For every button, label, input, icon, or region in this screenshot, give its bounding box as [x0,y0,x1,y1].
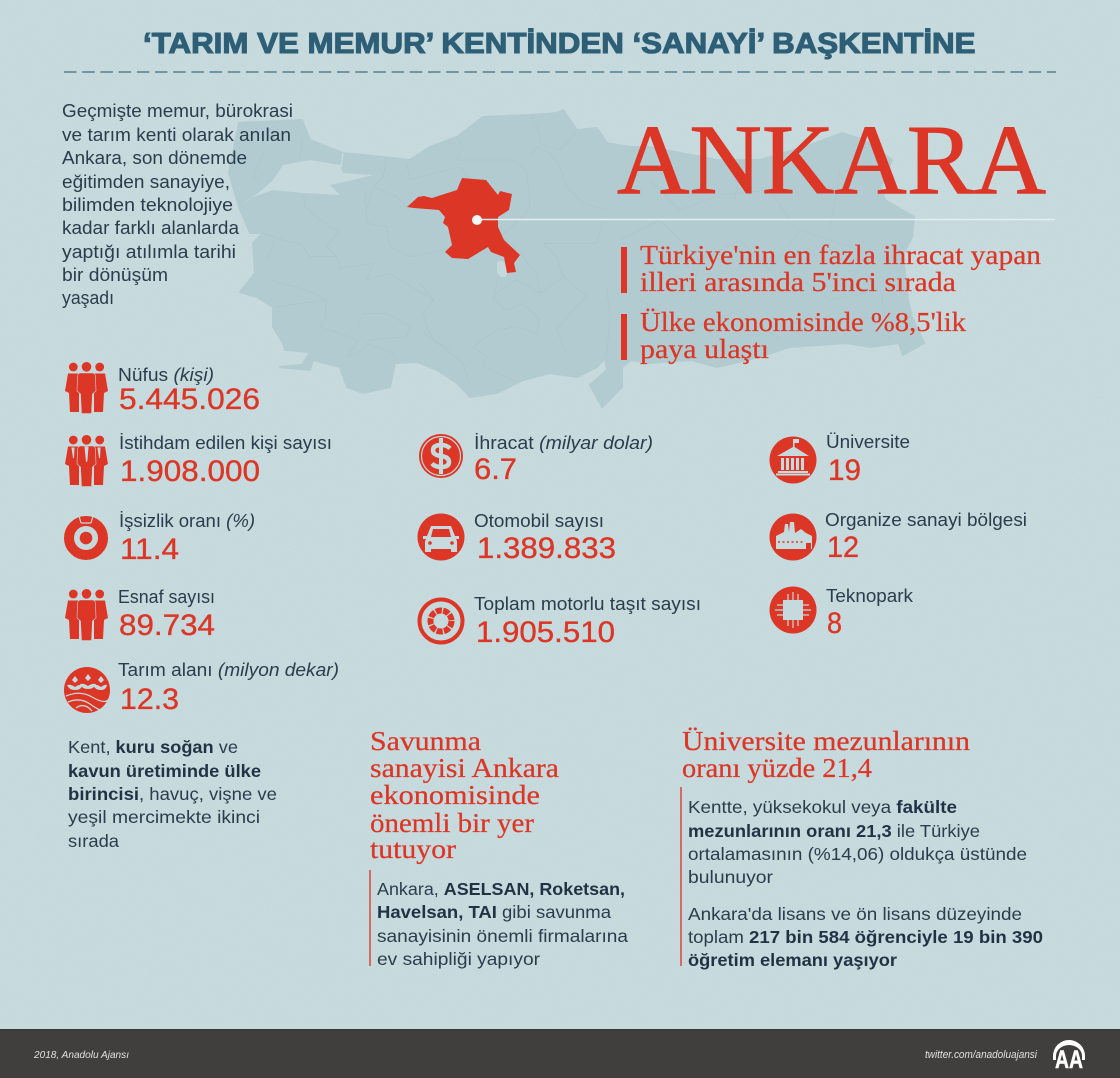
stat: tradesmen: 89.734 [119,609,215,642]
stat: farmland: 12.3 [120,683,179,716]
stat: cars: Otomobil sayısı [474,511,604,531]
highlight: economy share [621,307,967,364]
intro text: Ankara, son dönemde [62,148,247,168]
stat: cars [418,511,616,565]
stat: motor vehicles: 1.905.510 [476,616,615,649]
heading: defense industry: ekonomisinde [370,780,540,810]
stat: farmland [64,660,339,716]
text block: defense industry: ev sahipliği yapıyor [377,949,540,969]
icon: wheel [420,600,462,642]
stat: cars: 1.389.833 [477,532,616,565]
intro text: ve tarım kenti olarak anılan [62,125,291,145]
heading: defense industry: sanayisi Ankara [370,753,559,783]
city name: ANKARA [617,104,1046,215]
stat: population: Nüfus (kişi) [118,365,214,385]
icon: farm plants [64,667,110,713]
stat: universities [770,432,910,487]
stat: unemployment: İşsizlik oranı (%) [119,511,255,531]
text block: defense industry: Ankara, ASELSAN, Roketsan, [377,879,625,899]
icon: university building [770,436,816,484]
heading: university graduates [682,726,971,783]
highlight: export rank [621,240,1042,297]
heading: university graduates: Üniversite mezunlarının [682,726,971,756]
map of Turkey [229,110,924,407]
icon: people [65,589,108,640]
text block: university graduates: Ankara'da lisans ve ön lisans düzeyinde [688,904,1022,924]
intro text: bir dönüşüm [62,265,168,285]
text block: agriculture: Kent, kuru soğan ve [68,737,238,757]
intro text: yaptığı atılımla tarihi [62,242,236,262]
stat: technoparks: Teknopark [826,586,914,606]
stat: exports [419,433,653,486]
text block: university graduates [681,787,1043,970]
highlight: economy share: paya ulaştı [640,334,769,364]
text block: agriculture [68,737,277,851]
text block: agriculture: kavun üretiminde ülke [68,761,261,781]
stat: universities: Üniversite [826,432,910,452]
stat: farmland: Tarım alanı (milyon dekar) [118,660,339,680]
footer twitter handle: twitter.com/anadoluajansi [925,1049,1037,1061]
intro text: yaşadı [62,288,114,308]
heading: defense industry [370,726,559,864]
stat: universities: 19 [828,454,861,487]
icon: people [65,362,108,414]
text block: defense industry: Havelsan, TAI gibi savunma [377,902,611,922]
text block: university graduates: öğretim elemanı yaşıyor [688,950,897,970]
heading: defense industry: Savunma [370,726,481,756]
stat: technoparks [770,586,914,640]
text block: university graduates: bulunuyor [688,867,773,887]
stat: industrial zones [770,510,1027,564]
icon: agency logo: AA [1055,1046,1083,1074]
stat: population [65,362,260,416]
stat: employment [65,433,332,488]
intro text [62,101,293,308]
icon: dollar coin [419,434,463,478]
stat: industrial zones: 12 [827,531,859,564]
intro text: Geçmişte memur, bürokrasi [62,101,293,121]
text block: university graduates: ortalamasının (%14,06) oldukça üstünde [688,844,1027,864]
text block: university graduates: toplam 217 bin 584 öğrenciyle 19 bin 390 [688,927,1043,947]
stat: motor vehicles: Toplam motorlu taşıt sayısı [474,594,701,614]
stat: population: 5.445.026 [119,383,260,416]
icon: agency logo [1053,1040,1085,1074]
icon: car [418,514,464,560]
text block: defense industry: sanayisinin önemli firmalarına [377,926,628,946]
icon: microchip [770,586,816,634]
stat: motor vehicles [420,594,701,649]
text block: agriculture: sırada [68,831,119,851]
highlight: economy share: Ülke ekonomisinde %8,5'lik [640,307,967,337]
text block: defense industry [370,870,628,969]
text block: university graduates: Kentte, yüksekokul veya fakülte [688,797,957,817]
highlight: export rank: illeri arasında 5'inci sırada [640,267,956,297]
stat: exports: 6.7 [474,453,517,486]
heading: university graduates: oranı yüzde 21,4 [682,753,873,783]
stat: tradesmen: Esnaf sayısı [118,587,215,607]
stat: employment: 1.908.000 [120,455,260,488]
icon: target [69,516,103,555]
stat: exports: İhracat (milyar dolar) [474,433,653,453]
intro text: bilimden teknolojiye [62,195,233,215]
stat: unemployment [69,511,255,566]
text block: agriculture: yeşil mercimekte ikinci [68,807,260,827]
intro text: kadar farklı alanlarda [62,218,240,238]
highlight: export rank: Türkiye'nin en fazla ihracat yapan [640,240,1042,270]
connector line with marker [472,215,1055,225]
stat: industrial zones: Organize sanayi bölgesi [825,510,1027,530]
stat: unemployment: 11.4 [120,533,179,566]
icon: people with ties [65,435,108,486]
stat: technoparks: 8 [827,607,842,640]
footer [0,1029,1120,1078]
text block: university graduates: mezunlarının oranı 21,3 ile Türkiye [688,821,980,841]
heading: defense industry: önemli bir yer [370,808,534,838]
Ankara province highlight [407,178,520,277]
heading: defense industry: tutuyor [370,834,456,864]
footer credit: 2018, Anadolu Ajansı [33,1049,129,1061]
icon: factory [770,514,816,560]
stat: tradesmen [65,587,215,642]
text block: agriculture: birincisi, havuç, vişne ve [68,784,277,804]
stat: employment: İstihdam edilen kişi sayısı [119,433,332,453]
intro text: eğitimden sanayiye, [62,172,230,192]
title dashed divider [64,71,1056,73]
title: ‘TARIM VE MEMUR’ KENTİNDEN ‘SANAYİ’ BAŞKENTİNE [143,28,975,60]
